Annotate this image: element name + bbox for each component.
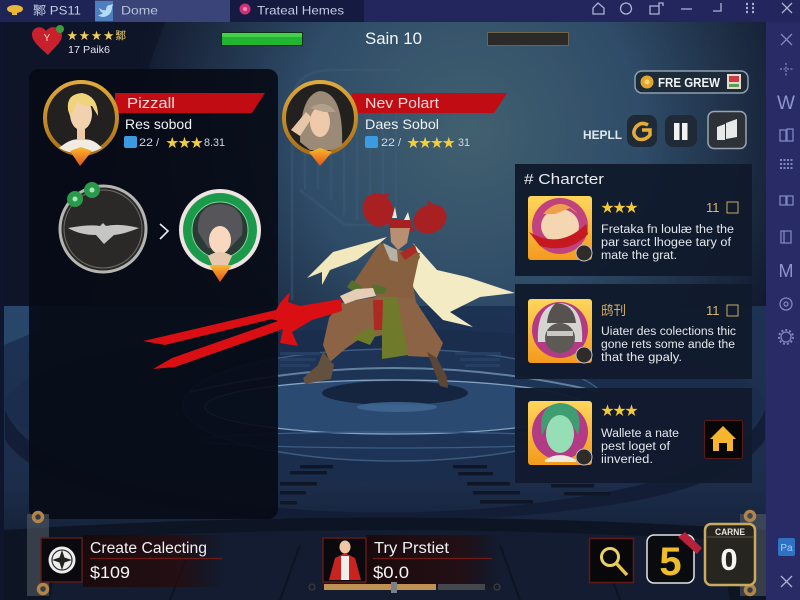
try action: $0.0 <box>373 563 409 582</box>
description: mate the grat. <box>601 250 677 262</box>
frame post left <box>27 512 49 596</box>
slider <box>309 582 500 593</box>
icon: wing emblem <box>60 182 146 272</box>
create action: $109 <box>90 563 130 582</box>
subtitle: Daes Sobol <box>365 116 439 132</box>
right sidebar: W <box>777 93 795 114</box>
card 2 <box>515 284 752 379</box>
stats: 31 <box>458 137 470 149</box>
create action <box>41 535 223 587</box>
green progress bar <box>221 32 303 46</box>
panel: character list <box>515 164 752 483</box>
green cuffs <box>347 280 387 294</box>
stars: ★★★ <box>601 200 638 215</box>
head <box>390 228 410 250</box>
red sash <box>373 300 383 330</box>
name ribbon <box>115 93 265 113</box>
badge: FRE GREW: FRE GREW <box>658 76 720 90</box>
cape <box>307 237 387 285</box>
hero character with spear <box>143 188 515 388</box>
description: gone rets some ande the <box>601 339 735 351</box>
player status <box>32 25 126 56</box>
description <box>601 326 736 364</box>
stats: ★★★ <box>166 136 203 150</box>
count <box>706 200 738 215</box>
hands <box>340 288 376 304</box>
points label: 17 Paik6 <box>68 45 110 56</box>
count: 11 <box>706 303 720 318</box>
button: search <box>590 538 634 582</box>
button: pause <box>665 115 697 147</box>
stats: 22 <box>381 137 395 149</box>
list heading panel with card 1 <box>515 164 752 276</box>
portrait 2 <box>528 299 592 363</box>
avatar <box>45 82 117 166</box>
heading: # Charcter <box>524 171 604 188</box>
badge: carne <box>705 524 755 585</box>
right coat skirt <box>394 297 443 360</box>
description: par sarct lhogee tary of <box>601 237 732 249</box>
tab: Dome <box>95 0 230 22</box>
tab: Trateal Hemes <box>230 0 364 22</box>
right sidebar <box>766 22 800 600</box>
rating stars: ★★★★鄹 <box>67 30 126 42</box>
icon: figure <box>323 538 366 582</box>
bottom bar <box>27 512 766 596</box>
help label: HEPLL <box>583 130 622 142</box>
empty progress bar <box>488 32 568 46</box>
level title: Sain 10 <box>365 29 422 48</box>
right boot <box>427 352 448 388</box>
window controls <box>593 3 792 14</box>
stats <box>365 136 470 150</box>
green coat panels <box>382 297 408 359</box>
stats: ★★★★ <box>407 136 455 150</box>
count: 11 <box>706 200 720 215</box>
title: 鸱刊 <box>601 303 626 318</box>
description <box>601 224 734 262</box>
name ribbon <box>352 93 507 113</box>
avatar: upgraded character <box>179 189 261 282</box>
stats <box>124 136 225 150</box>
spear <box>143 292 342 369</box>
stats: / <box>398 137 402 149</box>
stats: 8.31 <box>204 137 225 149</box>
icon: home button <box>704 420 742 458</box>
tab: app: 鄹 PS11 <box>33 4 81 18</box>
right sidebar: Pa <box>780 543 793 554</box>
character card: Nev Polart <box>284 82 507 166</box>
button: G coin <box>627 115 657 147</box>
badge: carne: CARNE <box>715 527 745 538</box>
tab: app <box>0 0 95 22</box>
coat torso <box>352 243 420 302</box>
description: that the gpaly. <box>601 352 682 364</box>
frame post right <box>740 512 766 596</box>
icon: compass <box>41 538 82 582</box>
portrait 1 <box>528 196 592 261</box>
badge: count 5 <box>647 532 702 584</box>
stats: 22 <box>139 137 153 149</box>
tab: Trateal Hemes: Trateal Hemes <box>257 4 344 18</box>
panel: left team <box>29 69 278 519</box>
description: Fretaka fn loulæ the the <box>601 224 734 236</box>
stars: ★★★ <box>601 403 638 418</box>
count <box>706 303 738 318</box>
description: iinveried. <box>601 454 653 466</box>
name ribbon: Nev Polart <box>365 95 440 112</box>
avatar <box>284 82 356 166</box>
card 3 <box>515 388 752 483</box>
badge: count 5: 5 <box>659 540 682 584</box>
subtitle: Res sobod <box>125 116 192 132</box>
button: cards <box>708 112 746 148</box>
tab: Dome: Dome <box>121 4 158 18</box>
create action: Create Calecting <box>90 540 207 557</box>
description: Wallete a nate <box>601 428 679 440</box>
stats: / <box>156 137 160 149</box>
portrait 3 <box>528 401 592 465</box>
feathered headdress <box>357 188 451 239</box>
collar <box>400 245 417 260</box>
right sidebar: M <box>778 261 794 281</box>
icon: heart: Y <box>44 33 51 44</box>
badge: FRE GREW <box>635 71 748 93</box>
description: pest loget of <box>601 441 671 453</box>
try action: Try Prstiet <box>374 540 450 557</box>
left trouser and coat <box>323 296 383 362</box>
name ribbon: Pizzall <box>127 95 175 112</box>
top window bar <box>0 0 800 22</box>
arrow: upgrade chevron <box>160 224 168 239</box>
try action <box>323 535 501 587</box>
description <box>601 428 679 466</box>
description: Uiater des colections thic <box>601 326 736 338</box>
scarf <box>383 243 398 262</box>
character card: Pizzall <box>45 82 265 166</box>
left boot <box>303 352 334 384</box>
horns <box>392 207 410 220</box>
badge: carne: 0 <box>720 542 738 577</box>
